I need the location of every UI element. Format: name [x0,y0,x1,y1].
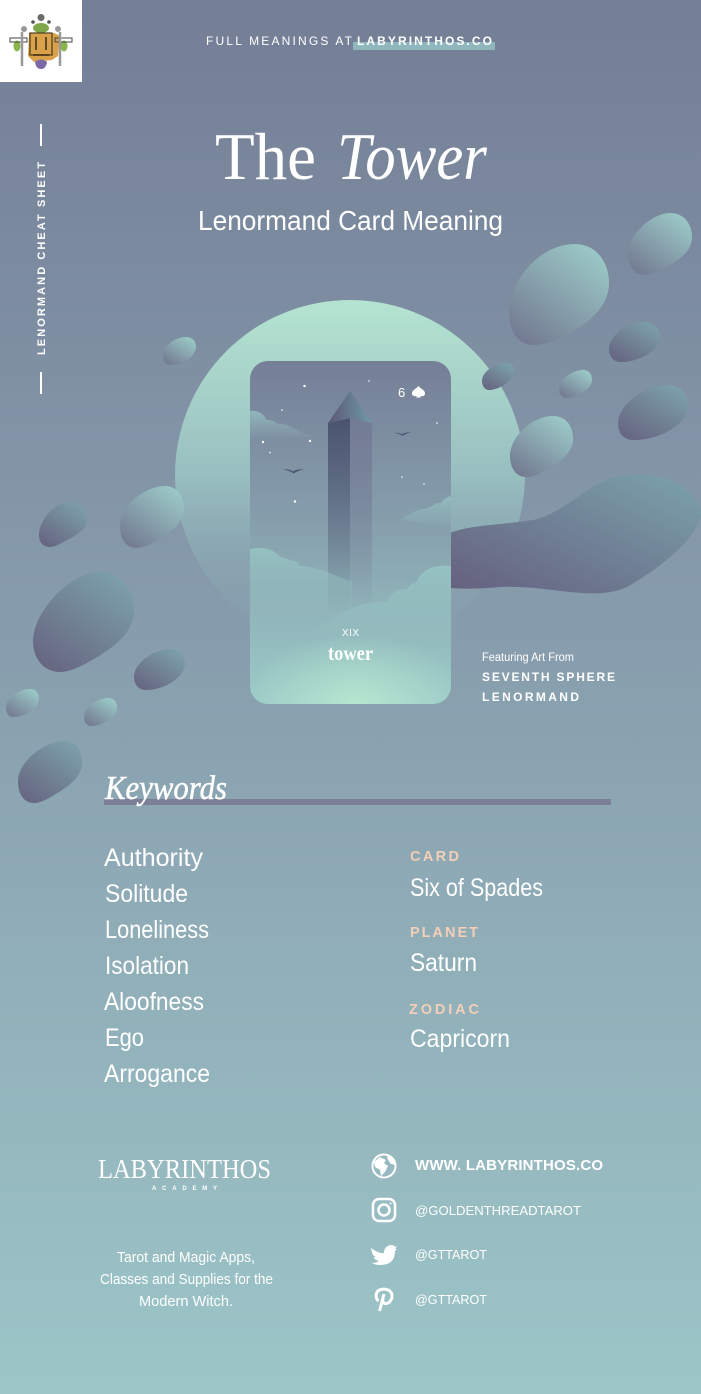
icon: instagram [373,1199,395,1221]
top link [206,34,495,50]
card number and suit: 6 [398,385,405,400]
footer tagline: Classes and Supplies for the [100,1271,273,1288]
icon: pinterest [376,1289,392,1311]
keywords heading: Keywords [104,770,227,807]
keyword list: Ego [105,1024,144,1052]
card attribute: CARD [410,849,459,865]
pinterest handle: @GTTAROT [415,1292,487,1307]
subtitle: Lenormand Card Meaning [198,205,503,236]
zodiac attribute: ZODIAC [409,1002,480,1018]
lower left cloud [250,548,352,592]
keyword list: Arrogance [104,1060,210,1088]
upper left cloud [250,410,305,434]
footer tagline [100,1249,273,1310]
keyword list [104,844,210,1088]
twitter handle: @GTTAROT [415,1247,487,1262]
upper right cloud [402,496,451,520]
zodiac attribute [409,1002,510,1053]
tarot card [250,361,451,704]
keyword list: Isolation [105,952,189,980]
big wave rock [450,475,701,593]
art credit [482,652,615,704]
title: The [215,120,316,194]
card attribute [410,849,543,902]
card name: tower [328,641,373,665]
logo box [0,0,82,82]
footer tagline: Modern Witch. [139,1293,233,1310]
planet attribute: PLANET [410,925,478,941]
top link: FULL MEANINGS AT [206,34,353,48]
tower [328,392,372,588]
art credit: SEVENTH SPHERE [482,670,615,684]
footer logo: LABYRINTHOS [98,1154,271,1184]
art credit: Featuring Art From [482,652,574,664]
zodiac attribute: Capricorn [410,1025,510,1053]
keyword list: Authority [104,844,203,872]
side label: LENORMAND CHEAT SHEET [36,162,48,355]
card attribute: Six of Spades [410,874,543,902]
instagram handle: @GOLDENTHREADTAROT [415,1203,581,1218]
keyword list: Loneliness [105,916,209,944]
footer tagline: Tarot and Magic Apps, [117,1249,255,1266]
website: WWW. LABYRINTHOS.CO [415,1157,603,1174]
floating rocks [6,213,692,803]
moon circle [175,300,525,650]
birds [283,432,411,474]
card numeral: XIX [342,628,359,639]
art credit: LENORMAND [482,690,579,704]
card number and suit [398,385,425,400]
keyword list: Solitude [105,880,188,908]
keyword list: Aloofness [104,988,204,1016]
footer logo: ACADEMY [152,1186,217,1192]
keywords heading [104,770,611,807]
icon: twitter [371,1245,397,1265]
top link: LABYRINTHOS.CO [357,34,492,48]
title: Tower [337,120,488,194]
title [215,120,488,194]
icon: globe [372,1154,396,1178]
stars [262,380,438,503]
lower right cloud [358,566,451,606]
planet attribute: Saturn [410,949,477,977]
planet attribute [410,925,478,977]
